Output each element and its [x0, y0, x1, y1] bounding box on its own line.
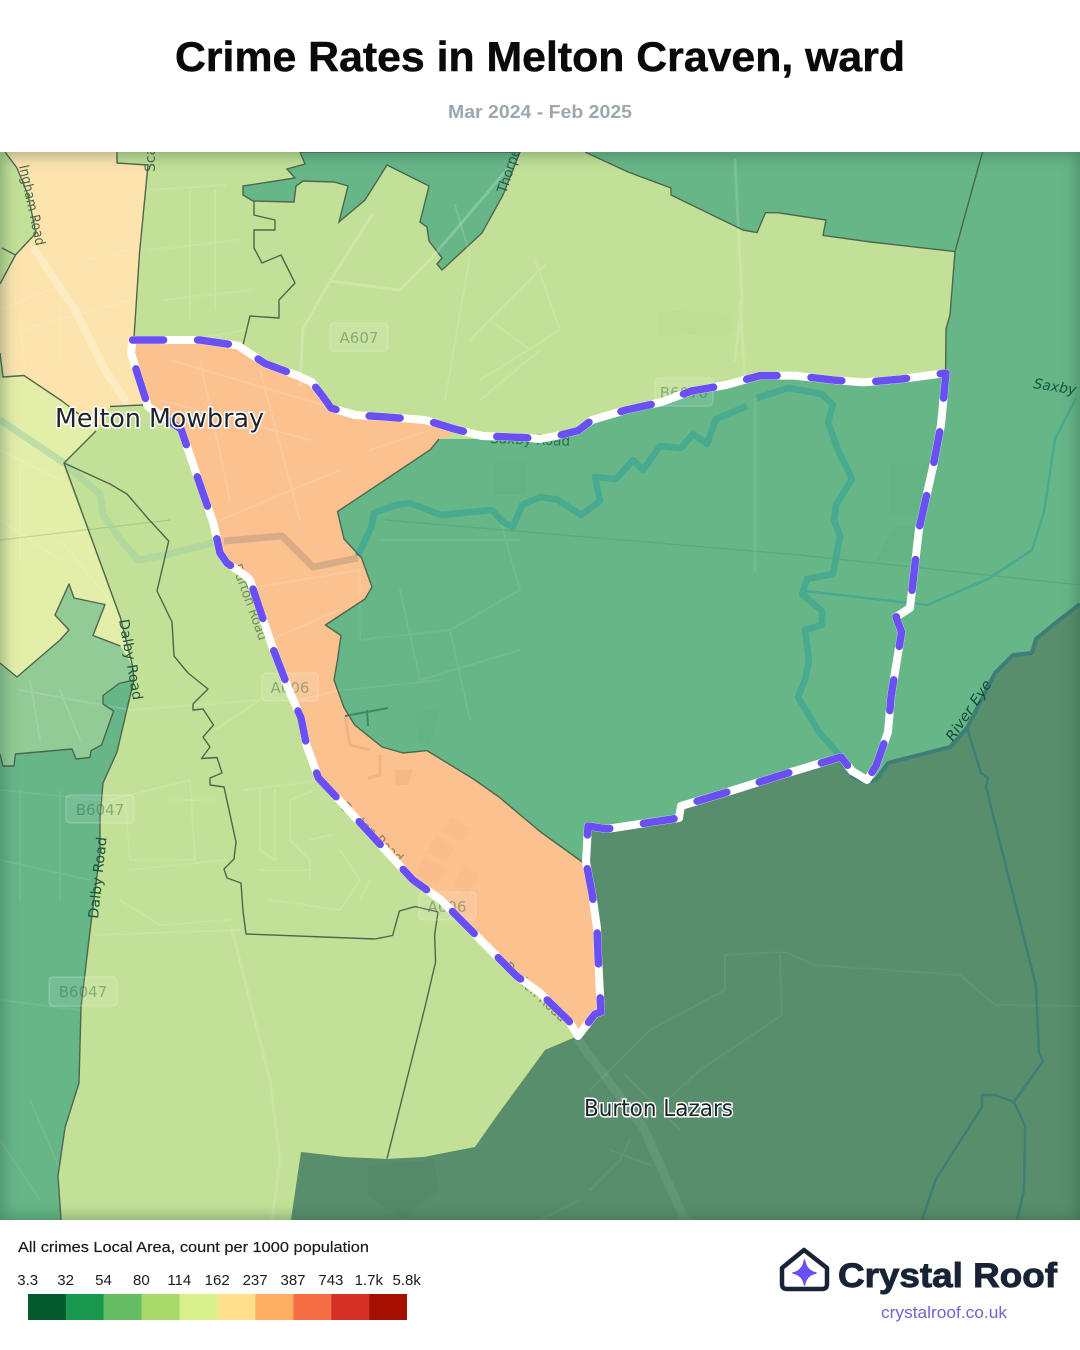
stream east of the ward: [805, 398, 1076, 605]
road label: Burton Road centre: Burton Road: [337, 799, 406, 866]
ward outlines: [0, 152, 982, 1220]
road shield: A606 south: A606: [428, 898, 466, 916]
legend scale labels: 162: [205, 1272, 230, 1289]
region: Melton Craven ward fill: [131, 340, 601, 1036]
place label: Burton Lazars: Burton Lazars: [584, 1096, 733, 1122]
road shield: B6047 north: B6047: [76, 801, 124, 819]
legend scale labels: [17, 1272, 421, 1289]
road label: Ingham Road: Ingham Road: [15, 164, 48, 247]
legend colour bar: [28, 1294, 407, 1320]
region: cream town centre ward: [0, 152, 148, 431]
road shield: B6047 north: [66, 795, 134, 823]
legend scale labels: 387: [280, 1272, 306, 1289]
region: west medium green ward: [0, 680, 134, 1220]
legend scale labels: 743: [318, 1272, 343, 1289]
wordmark: Crystal Roof: [838, 1257, 1058, 1295]
legend title: All crimes Local Area, count per 1000 population: [18, 1239, 369, 1256]
road label: River Eye: River Eye: [943, 677, 995, 744]
legend scale labels: 237: [243, 1272, 268, 1289]
road shield: A607: A607: [340, 329, 378, 347]
road shield: A606 south: [419, 892, 476, 920]
rail line: [0, 520, 1080, 585]
logo: Crystal Roof: [780, 1248, 1058, 1322]
website url: crystalroof.co.uk: [881, 1304, 1008, 1322]
road label: Dalby Road south: Dalby Road: [86, 836, 111, 919]
legend scale labels: 3.3: [17, 1272, 38, 1289]
road label: Dalby Road north: Dalby Road: [115, 618, 145, 701]
road shield: B6047 south: [49, 977, 117, 1006]
road label: Saxby: Saxby: [1032, 376, 1078, 399]
region: west yellow-green ward: [0, 376, 133, 677]
subtitle: date range: Mar 2024 - Feb 2025: [448, 102, 632, 122]
road shield: A606 north: A606: [271, 679, 309, 697]
legend scale labels: 80: [133, 1272, 150, 1289]
ward boundary: [131, 340, 946, 1036]
region: north-centre green ward: [243, 152, 520, 270]
street network: [0, 160, 1080, 1220]
river: western section: [0, 420, 213, 560]
streams in the dark ward: [922, 728, 1043, 1220]
land-use patches: [345, 310, 929, 1220]
choropleth map: [0, 152, 1080, 1220]
road shield: B6047 south: B6047: [59, 983, 107, 1001]
region: medium green base: [0, 152, 1080, 1220]
river: eastern section: [358, 388, 852, 756]
road label: Burton Road north: Burton Road: [228, 562, 271, 643]
region: west pale green ward: [0, 584, 134, 766]
River Eye along the dark ward edge: [850, 604, 1080, 782]
region: dark green ward: [291, 604, 1080, 1220]
legend scale labels: 32: [57, 1272, 74, 1289]
river: section through the ward: [224, 536, 358, 567]
road shield: B6070: B6070: [660, 384, 708, 402]
road shield: A607: [330, 323, 388, 351]
title: Crime Rates in Melton Craven, ward: [175, 33, 905, 80]
legend scale labels: 54: [95, 1272, 112, 1289]
legend: [17, 1239, 421, 1320]
road label: Burton Road south: Burton Road: [500, 959, 570, 1025]
icon: house with star: [782, 1250, 827, 1289]
road shield: B6070: [655, 378, 713, 406]
legend scale labels: 1.7k: [355, 1272, 383, 1289]
region: light green wards: [0, 152, 955, 1220]
legend scale labels: 5.8k: [393, 1272, 421, 1289]
place label: Melton Mowbray: Melton Mowbray: [55, 404, 264, 434]
road shield: A606 north: [262, 673, 318, 701]
road label: Saxby Road: Saxby Road: [490, 431, 570, 450]
legend scale labels: 114: [167, 1272, 191, 1289]
